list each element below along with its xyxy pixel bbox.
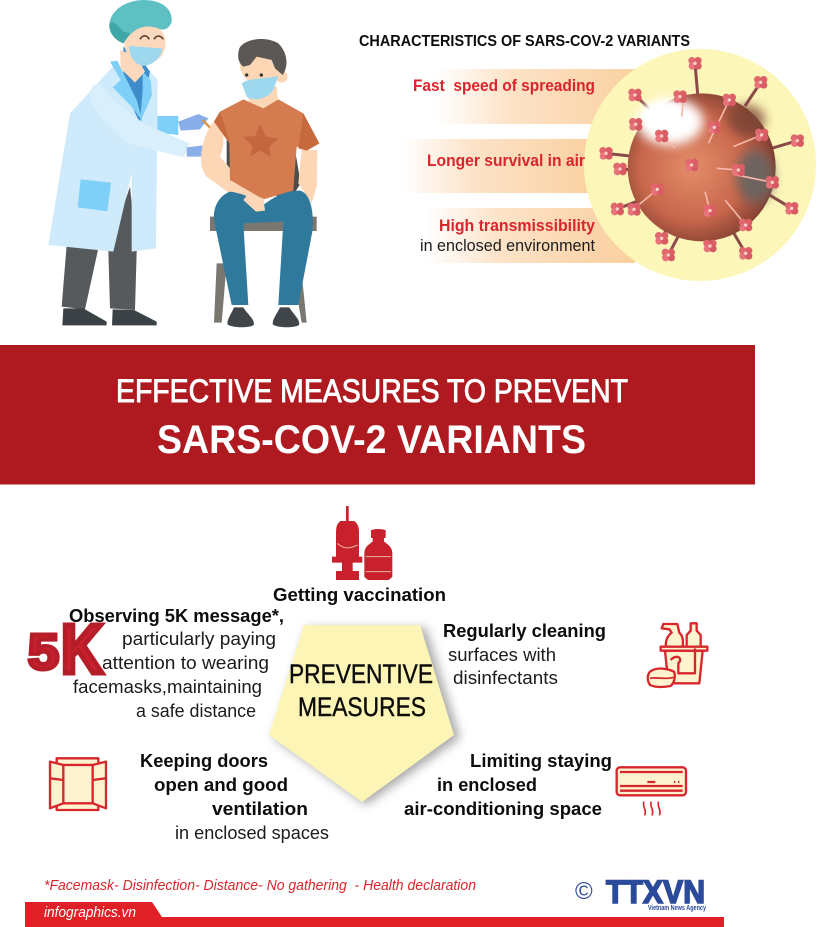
characteristic: longer survival: Longer survival in air (427, 152, 586, 170)
text: 5K message: Observing 5K message*, (69, 606, 284, 626)
text: 5K message: particularly paying (122, 629, 276, 649)
icon: cleaning supplies (648, 623, 707, 687)
doctor (48, 0, 220, 325)
logo: TTXVN Vietnam News Agency: © (575, 878, 593, 905)
text: doors and ventilation: in enclosed spaces (175, 823, 329, 843)
text: 5K message (69, 606, 284, 721)
text: doors and ventilation: open and good (154, 775, 288, 795)
title banner: EFFECTIVE MEASURES TO PREVENT (116, 373, 628, 409)
section heading: characteristics: CHARACTERISTICS OF SARS-COV-2 VARIANTS (359, 33, 690, 50)
title banner (0, 345, 755, 484)
title banner: SARS-COV-2 VARIANTS (157, 418, 586, 462)
icon: coronavirus on yellow disc (584, 49, 816, 281)
text: regular cleaning: surfaces with (448, 645, 556, 665)
icon: 5K: 5 (28, 624, 59, 680)
text: limiting enclosed AC: Limiting staying (470, 751, 612, 771)
patient (201, 39, 319, 327)
label: getting vaccination: Getting vaccination (273, 585, 446, 605)
logo: TTXVN Vietnam News Agency: TTXVN (606, 874, 705, 910)
footnote: 5K definition: *Facemask- Disinfection- Distance- No gathering - Health declaration (44, 877, 476, 894)
panel: characteristic bands (400, 69, 645, 263)
text: doors and ventilation: Keeping doors (140, 751, 268, 771)
center pentagon: preventive measures (269, 625, 460, 805)
logo: TTXVN Vietnam News Agency (575, 874, 706, 912)
icon: syringe and vial (333, 507, 392, 579)
characteristic: high transmissibility: in enclosed environment (420, 237, 595, 255)
text: limiting enclosed AC: in enclosed (437, 775, 537, 795)
text: 5K message: a safe distance (136, 701, 256, 721)
characteristic: fast speed: Fast speed of spreading (413, 77, 595, 95)
icon: 5K: K (61, 610, 103, 688)
icon: air conditioner (617, 767, 686, 815)
text: limiting enclosed AC (404, 751, 612, 819)
icon: open window (50, 758, 106, 810)
footer bar (25, 902, 724, 927)
text: doors and ventilation: ventilation (212, 799, 308, 819)
text: limiting enclosed AC: air-conditioning space (404, 799, 602, 819)
characteristic: high transmissibility (420, 217, 596, 255)
text: doors and ventilation (140, 751, 329, 843)
text: regular cleaning: Regularly cleaning (443, 621, 606, 641)
center pentagon: preventive measures: PREVENTIVE (289, 659, 433, 689)
text: 5K message: facemasks,maintaining (73, 677, 262, 697)
illustration: doctor vaccinating patient (48, 0, 319, 327)
characteristic: high transmissibility: High transmissibility (439, 217, 596, 235)
center pentagon: preventive measures: MEASURES (298, 692, 426, 722)
text: regular cleaning (443, 621, 606, 688)
icon: 5K (28, 610, 103, 688)
logo: TTXVN Vietnam News Agency: Vietnam News Agency (648, 905, 706, 912)
text: 5K message: attention to wearing (102, 653, 269, 673)
footer bar: infographics.vn (44, 904, 136, 921)
text: regular cleaning: disinfectants (453, 668, 558, 688)
